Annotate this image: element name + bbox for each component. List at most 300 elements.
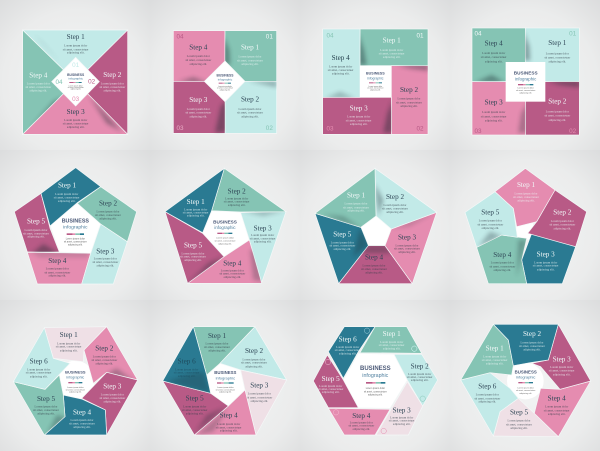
step 4: Step 4	[220, 412, 238, 420]
step 4: Lorem ipsum dolor	[329, 64, 352, 68]
step 3: Step 3	[67, 108, 85, 116]
step 5: sit amet, consectetuer	[477, 222, 503, 227]
step 2: adipiscing elit.	[400, 104, 418, 108]
step 2: sit amet, consectetuer	[519, 344, 545, 349]
center hexagon: Lorem ipsum dolor	[366, 387, 385, 390]
panel: square quadrants with center square	[472, 28, 579, 135]
step 6	[328, 327, 375, 378]
step 3: Step 3	[254, 224, 272, 232]
step 3: Step 3	[398, 234, 416, 242]
step 5	[465, 192, 517, 247]
step 2: sit amet, consectetuer	[99, 85, 125, 90]
step 1	[224, 31, 277, 81]
step 1: adipiscing elit.	[347, 209, 365, 213]
step 2: Step 2	[95, 345, 114, 353]
step 2: adipiscing elit.	[241, 115, 259, 119]
step 4: adipiscing elit.	[224, 275, 241, 279]
step 3: adipiscing elit.	[254, 240, 272, 244]
step 1: Lorem ipsum dolor	[238, 55, 262, 59]
step 1: adipiscing elit.	[60, 348, 78, 352]
center square: adipiscing elit.	[519, 91, 532, 94]
center label: adipiscing elit.	[69, 391, 82, 394]
center pentagon: Lorem ipsum dolor	[216, 236, 234, 239]
step 4: Step 4	[365, 254, 383, 262]
center diamond: sit amet, consectetuer	[217, 87, 234, 90]
step 4: Step 4	[48, 257, 67, 265]
step 2: sit amet, consectetuer	[95, 213, 121, 218]
step 4: adipiscing elit.	[353, 427, 370, 431]
step 2: adipiscing elit.	[386, 210, 404, 214]
step 2	[220, 327, 287, 380]
step 4: sit amet, consectetuer	[348, 424, 374, 429]
step 4: sit amet, consectetuer	[328, 68, 354, 73]
panel: square pinwheel	[323, 29, 428, 134]
step 4: Lorem ipsum dolor	[27, 81, 50, 85]
step 4: sit amet, consectetuer	[69, 421, 95, 426]
step 1: sit amet, consectetuer	[343, 205, 369, 210]
center diamond: 01	[72, 62, 80, 69]
step 3: adipiscing elit.	[97, 264, 114, 268]
step 6: adipiscing elit.	[339, 351, 357, 355]
center square: BUSINESS	[366, 72, 385, 76]
step 3: adipiscing elit.	[537, 267, 555, 271]
step 1: Step 1	[208, 332, 226, 340]
step 1: sit amet, consectetuer	[544, 55, 570, 60]
step 5: Step 5	[333, 230, 352, 238]
step 3: adipiscing elit.	[553, 372, 571, 376]
center square: infographic	[367, 76, 384, 80]
step 6: sit amet, consectetuer	[335, 348, 361, 353]
step 4: Step 4	[485, 39, 503, 47]
step 2: Step 2	[228, 187, 246, 195]
step 1: Lorem ipsum dolor	[64, 44, 87, 48]
step 2: Step 2	[103, 71, 122, 79]
step 6: Lorem ipsum dolor	[476, 393, 499, 397]
step 5: Lorem ipsum dolor	[331, 240, 354, 244]
step 4	[339, 245, 412, 284]
step 1: sit amet, consectetuer	[183, 210, 209, 215]
step 3: sit amet, consectetuer	[346, 118, 372, 123]
step 6: Step 6	[339, 335, 357, 343]
step 2	[525, 81, 579, 135]
step 5: Step 5	[27, 218, 45, 226]
step 2: Step 2	[400, 86, 418, 94]
step 1	[165, 168, 224, 233]
center label: Lorem ipsum dolor	[517, 387, 534, 390]
center diamond: 04	[55, 79, 63, 86]
step 2: sit amet, consectetuer	[396, 100, 422, 105]
step 1	[23, 30, 127, 70]
step 4	[44, 395, 107, 435]
step 3: adipiscing elit.	[398, 250, 416, 254]
panel: hexagon two	[163, 327, 287, 435]
center square: Lorem ipsum dolor	[368, 86, 383, 88]
step 1	[44, 327, 107, 362]
step 2	[225, 81, 277, 133]
step 2: Lorem ipsum dolor	[383, 203, 407, 207]
step 3: sit amet, consectetuer	[389, 419, 415, 424]
step 1: sit amet, consectetuer	[63, 47, 89, 52]
step 4: Step 4	[29, 71, 48, 79]
step 5: Step 5	[481, 209, 500, 217]
center hexagon: infographic	[216, 375, 235, 380]
step 1: Step 1	[58, 182, 76, 190]
panel: pentagon one	[14, 168, 137, 284]
step 2: 02	[569, 128, 577, 135]
step 2: adipiscing elit.	[245, 364, 263, 368]
center square	[506, 62, 545, 102]
step 6: adipiscing elit.	[30, 374, 48, 378]
step 2: Lorem ipsum dolor	[242, 357, 266, 361]
step 2: Lorem ipsum dolor	[225, 196, 248, 200]
step 4: adipiscing elit.	[494, 268, 511, 272]
step 3: Lorem ipsum dolor	[94, 256, 117, 260]
step 5	[315, 213, 368, 284]
panel: square diagonal	[23, 30, 128, 134]
step 2: sit amet, consectetuer	[549, 223, 575, 228]
step 3: Lorem ipsum dolor	[248, 391, 271, 395]
center diamond: Lorem ipsum dolor	[69, 85, 83, 87]
step 4: adipiscing elit.	[190, 62, 207, 66]
center circle	[56, 361, 95, 399]
center label: Lorem ipsum dolor	[67, 386, 84, 389]
step 3: Lorem ipsum dolor	[534, 260, 557, 264]
panel: square quadrants with diamond	[173, 31, 277, 133]
panel: hexagon three	[313, 327, 438, 435]
center square: BUSINESS	[514, 70, 538, 75]
center square: sit amet, consectetuer	[516, 89, 536, 92]
step 5: Step 5	[322, 375, 340, 383]
step 4: adipiscing elit.	[485, 59, 503, 63]
step 2: adipiscing elit.	[104, 88, 121, 92]
center diamond: adipiscing elit.	[70, 88, 81, 91]
step 4: Step 4	[332, 54, 350, 62]
step 6	[163, 327, 211, 393]
center square: sit amet, consectetuer	[367, 87, 384, 90]
center diamond	[204, 61, 245, 102]
step 5: Lorem ipsum dolor	[24, 228, 48, 232]
step 4: adipiscing elit.	[220, 429, 238, 433]
step 2	[528, 190, 587, 247]
step 3	[376, 382, 423, 435]
step 5: Step 5	[184, 241, 202, 249]
center pentagon: BUSINESS	[62, 219, 89, 225]
step 2: Step 2	[548, 98, 567, 106]
step 6: Step 6	[178, 357, 196, 365]
step 2	[84, 327, 138, 383]
step 1: sit amet, consectetuer	[482, 358, 508, 363]
center label: infographic	[66, 376, 84, 380]
step 4: Step 4	[352, 412, 371, 420]
step 3: sit amet, consectetuer	[99, 396, 125, 401]
step 5: Lorem ipsum dolor	[183, 405, 206, 409]
step 3: Step 3	[553, 355, 571, 363]
step 5: sit amet, consectetuer	[23, 231, 49, 236]
step 3: Step 3	[350, 105, 368, 113]
center label: BUSINESS	[65, 370, 86, 375]
step 4: Lorem ipsum dolor	[221, 268, 244, 272]
step 4: sit amet, consectetuer	[185, 58, 211, 63]
center square: infographic	[515, 76, 537, 81]
step 1: Lorem ipsum dolor	[546, 51, 569, 55]
center hexagon: sit amet, consectetuer	[216, 388, 235, 391]
step 2: adipiscing elit.	[523, 348, 541, 352]
step 4: adipiscing elit.	[548, 412, 566, 416]
step 2: 02	[416, 125, 424, 132]
step 3: sit amet, consectetuer	[394, 247, 420, 252]
step 4: sit amet, consectetuer	[44, 270, 70, 275]
step 1	[360, 327, 422, 353]
step 6: adipiscing elit.	[479, 400, 496, 404]
step 4: Step 4	[189, 44, 208, 52]
center pentagon: infographic	[63, 225, 88, 231]
step 4: Lorem ipsum dolor	[70, 418, 94, 422]
step 3	[323, 97, 393, 134]
step 4: 04	[176, 34, 184, 41]
step 3	[472, 82, 527, 135]
step 1: adipiscing elit.	[517, 199, 535, 203]
step 1: sit amet, consectetuer	[379, 343, 405, 348]
step 1: adipiscing elit.	[187, 214, 205, 218]
step 3: sit amet, consectetuer	[63, 122, 89, 127]
center hexagon	[207, 363, 245, 406]
step 4: sit amet, consectetuer	[361, 267, 387, 272]
step 5	[313, 355, 358, 408]
center diamond: 02	[88, 79, 96, 86]
step 3	[82, 224, 127, 284]
step 5: adipiscing elit.	[184, 258, 202, 262]
step 3	[532, 324, 591, 389]
step 1: Step 1	[241, 43, 259, 51]
center diamond: infographic	[68, 77, 83, 81]
step 4: Lorem ipsum dolor	[187, 54, 210, 58]
step 5: Lorem ipsum dolor	[34, 405, 58, 409]
step 1	[461, 324, 513, 380]
step 4	[22, 30, 63, 134]
center hexagon: BUSINESS	[360, 366, 391, 372]
step 4: Lorem ipsum dolor	[545, 405, 568, 409]
step 3	[522, 232, 576, 284]
step 4	[477, 235, 527, 284]
step 3: Lorem ipsum dolor	[347, 115, 370, 119]
step 5: Lorem ipsum dolor	[181, 251, 205, 255]
step 1: adipiscing elit.	[67, 51, 85, 55]
center label	[65, 370, 86, 394]
center pentagon: BUSINESS	[213, 219, 237, 224]
step 2: Lorem ipsum dolor	[238, 107, 262, 111]
step 3: sit amet, consectetuer	[250, 236, 276, 241]
step 2: adipiscing elit.	[554, 226, 571, 230]
step 3: Lorem ipsum dolor	[390, 416, 413, 420]
step 1: 01	[569, 30, 577, 37]
step 4	[188, 240, 263, 283]
step 2: Lorem ipsum dolor	[93, 355, 116, 359]
step 4: adipiscing elit.	[73, 425, 91, 429]
step 1: Lorem ipsum dolor	[205, 341, 229, 345]
step 5: Lorem ipsum dolor	[479, 219, 502, 223]
step 3	[385, 212, 437, 284]
step 5	[165, 212, 225, 285]
step 1: Step 1	[60, 331, 78, 339]
step 5: Step 5	[510, 408, 528, 416]
step 2	[375, 168, 437, 229]
center hexagon: BUSINESS	[214, 370, 237, 375]
step 1	[359, 29, 428, 66]
step 2: 02	[266, 125, 273, 132]
center diamond: sit amet, consectetuer	[68, 86, 84, 89]
step 4: adipiscing elit.	[365, 270, 383, 274]
step 5: sit amet, consectetuer	[506, 422, 532, 427]
step 2	[394, 354, 438, 406]
step 4: adipiscing elit.	[30, 88, 47, 92]
center pentagon: infographic	[214, 225, 236, 230]
center diamond: 03	[72, 96, 80, 103]
step 2: Lorem ipsum dolor	[551, 219, 574, 223]
step 2: Step 2	[245, 347, 263, 355]
center label: sit amet, consectetuer	[66, 388, 85, 391]
center diamond: BUSINESS	[216, 74, 234, 78]
step 5: sit amet, consectetuer	[318, 387, 344, 392]
step 3: sit amet, consectetuer	[549, 369, 575, 374]
step 1: adipiscing elit.	[383, 346, 401, 350]
step 3: Step 3	[485, 98, 503, 106]
step 6: Step 6	[478, 382, 497, 390]
panel: hexagon four	[461, 324, 591, 437]
step 4: Lorem ipsum dolor	[491, 261, 514, 265]
step 3: sit amet, consectetuer	[246, 395, 272, 400]
step 3: adipiscing elit.	[393, 422, 411, 426]
step 1: adipiscing elit.	[208, 349, 226, 353]
step 4: Step 4	[548, 394, 566, 402]
panel: pentagon two	[165, 168, 286, 285]
step 1: Step 1	[383, 37, 401, 45]
step 1: adipiscing elit.	[58, 199, 76, 203]
center label: adipiscing elit.	[519, 392, 532, 395]
step 3: Lorem ipsum dolor	[395, 244, 419, 248]
step 2: sit amet, consectetuer	[382, 207, 408, 212]
step 1: Lorem ipsum dolor	[184, 207, 207, 211]
step 5: Step 5	[186, 395, 204, 403]
panel: pentagon three	[315, 168, 437, 284]
step 3	[241, 370, 287, 435]
step 5: adipiscing elit.	[334, 247, 351, 251]
step 1: Step 1	[347, 192, 365, 200]
step 2: adipiscing elit.	[411, 378, 429, 382]
step 2	[493, 324, 558, 366]
step 2: adipiscing elit.	[96, 361, 113, 365]
step 5: Lorem ipsum dolor	[507, 419, 531, 423]
step 2: sit amet, consectetuer	[407, 375, 433, 380]
step 2: adipiscing elit.	[228, 203, 246, 207]
center square: Lorem ipsum dolor	[517, 87, 534, 90]
step 2: Lorem ipsum dolor	[96, 209, 120, 213]
step 2: Step 2	[553, 209, 572, 217]
step 5: sit amet, consectetuer	[329, 244, 355, 249]
center hexagon: adipiscing elit.	[219, 391, 232, 394]
step 4	[472, 28, 525, 82]
step 4	[194, 390, 256, 435]
center diamond: BUSINESS	[67, 73, 85, 77]
center square	[360, 66, 391, 97]
center label: sit amet, consectetuer	[516, 389, 536, 392]
step 6: sit amet, consectetuer	[174, 371, 200, 376]
step 4	[534, 381, 591, 437]
step 2	[77, 187, 137, 242]
step 1	[315, 168, 376, 228]
step 3: 03	[326, 125, 334, 132]
step 2: Lorem ipsum dolor	[101, 81, 124, 85]
step 3: 03	[176, 125, 184, 132]
step 4: Lorem ipsum dolor	[362, 264, 386, 268]
center label: BUSINESS	[515, 369, 537, 374]
center hexagon	[343, 353, 407, 408]
step 3: Lorem ipsum dolor	[187, 107, 210, 111]
step 3: sit amet, consectetuer	[533, 264, 559, 269]
center pentagon: adipiscing elit.	[218, 242, 232, 245]
step 5: sit amet, consectetuer	[33, 408, 59, 413]
step 3: adipiscing elit.	[67, 125, 85, 129]
step 6: sit amet, consectetuer	[474, 396, 500, 401]
step 2: Lorem ipsum dolor	[520, 340, 544, 344]
panel: hexagon one	[13, 327, 138, 435]
panel: pentagon four	[465, 168, 587, 284]
step 4: sit amet, consectetuer	[489, 264, 515, 269]
step 5: adipiscing elit.	[186, 412, 204, 416]
step 1: Lorem ipsum dolor	[57, 341, 80, 345]
step 1	[524, 28, 579, 82]
step 3: adipiscing elit.	[104, 400, 121, 404]
center hexagon: Lorem ipsum dolor	[217, 386, 234, 389]
step 4: Lorem ipsum dolor	[482, 51, 505, 55]
center pentagon: sit amet, consectetuer	[214, 239, 236, 242]
step 6: sit amet, consectetuer	[26, 371, 52, 376]
step 6: Step 6	[30, 357, 48, 365]
step 1	[495, 168, 555, 227]
step 2: sit amet, consectetuer	[241, 361, 267, 366]
step 2: Step 2	[99, 199, 117, 207]
step 1: adipiscing elit.	[549, 60, 566, 64]
step 5: adipiscing elit.	[322, 390, 340, 394]
step 4	[27, 251, 91, 284]
step 5	[14, 193, 59, 253]
step 5: adipiscing elit.	[37, 412, 55, 416]
center square: adipiscing elit.	[370, 88, 381, 91]
center pentagon	[203, 211, 249, 257]
step 3: Step 3	[103, 382, 122, 390]
step 1: adipiscing elit.	[486, 361, 504, 365]
center pentagon: sit amet, consectetuer	[64, 240, 87, 243]
step 5	[13, 375, 66, 435]
step 3: adipiscing elit.	[485, 118, 503, 122]
step 4	[328, 408, 390, 435]
step 5: adipiscing elit.	[27, 234, 45, 238]
step 3: Lorem ipsum dolor	[550, 365, 573, 369]
step 5: Lorem ipsum dolor	[319, 384, 342, 388]
step 4: sit amet, consectetuer	[216, 425, 242, 430]
step 2: Step 2	[523, 330, 541, 338]
step 1: sit amet, consectetuer	[204, 345, 230, 350]
center diamond: Lorem ipsum dolor	[218, 86, 232, 88]
step 4: sit amet, consectetuer	[481, 55, 507, 60]
step 2: Lorem ipsum dolor	[546, 110, 569, 114]
step 6: Lorem ipsum dolor	[175, 367, 198, 371]
step 4: sit amet, consectetuer	[219, 272, 245, 277]
step 1: Step 1	[187, 198, 205, 206]
step 1: Step 1	[383, 330, 401, 338]
step 4: Lorem ipsum dolor	[350, 421, 373, 425]
step 6	[461, 373, 518, 436]
step 4: sit amet, consectetuer	[544, 408, 570, 413]
